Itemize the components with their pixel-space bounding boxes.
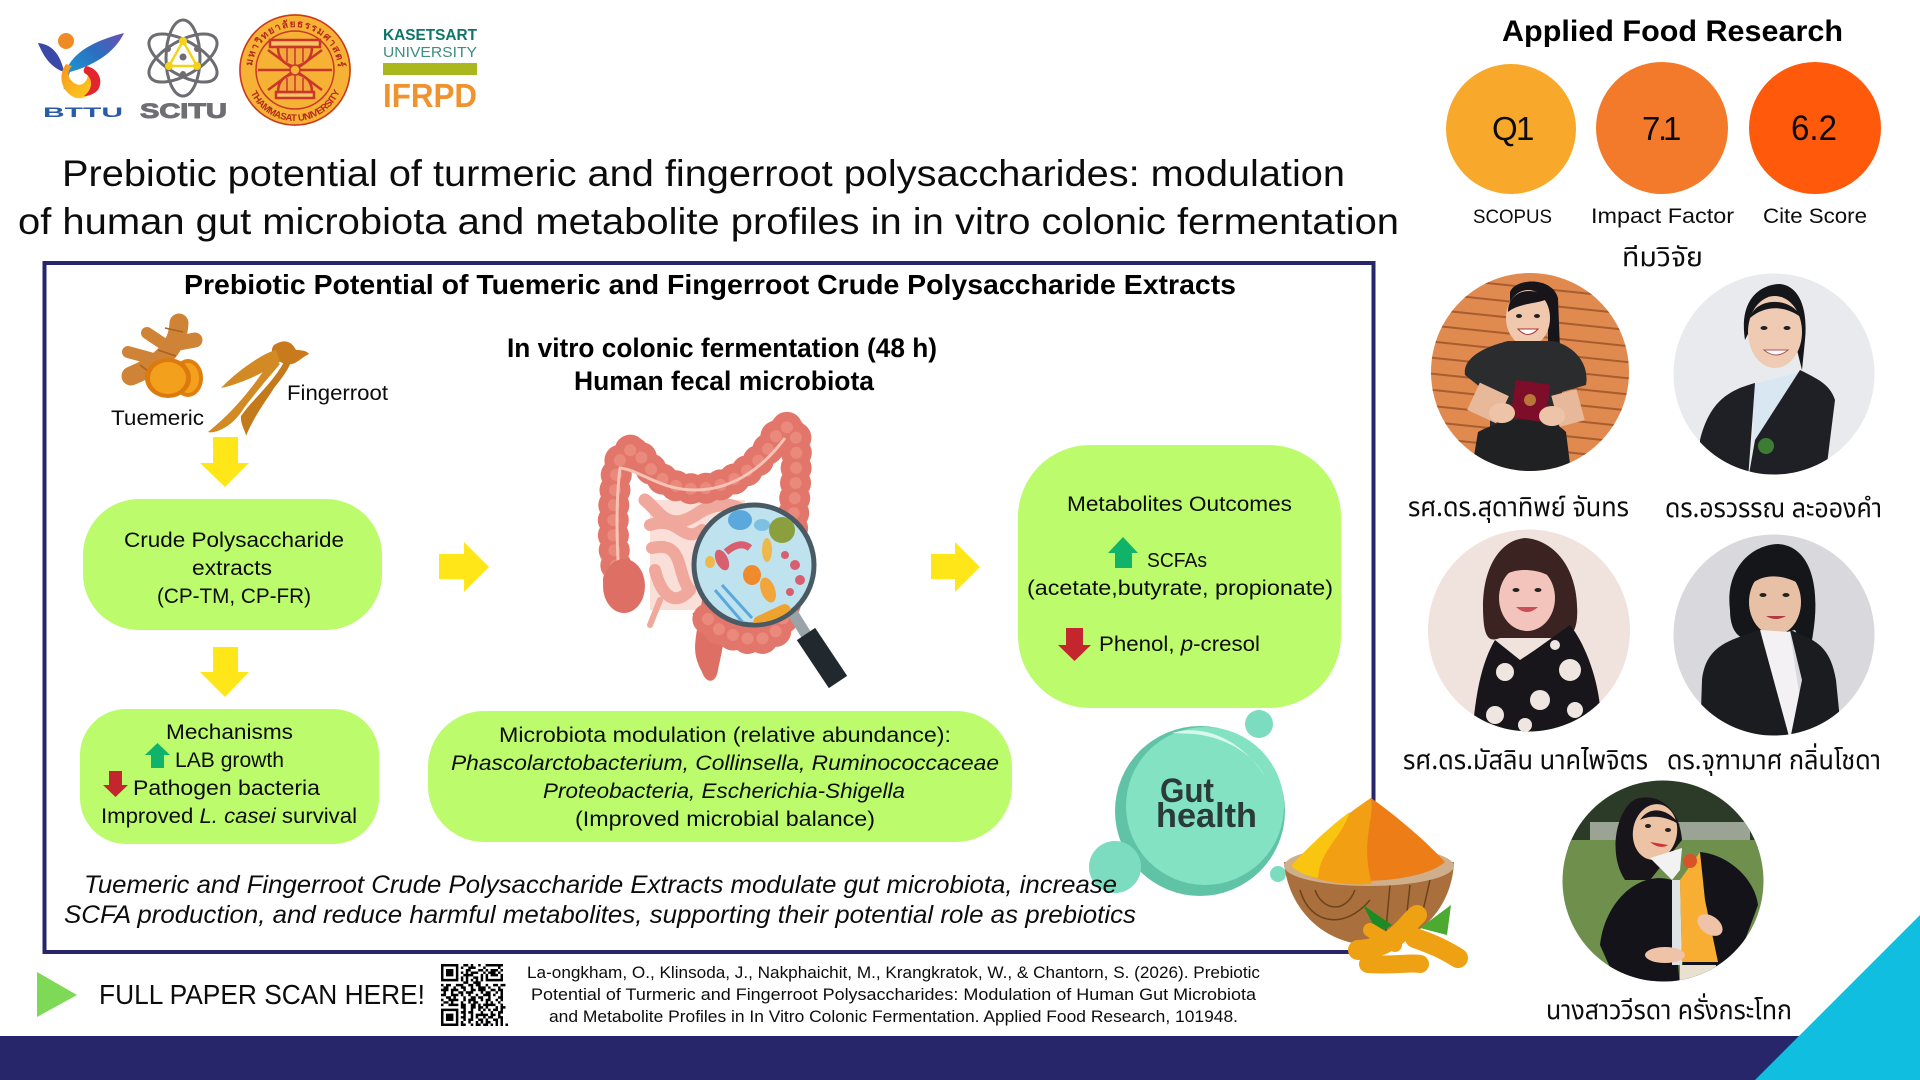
portrait 2	[1670, 270, 1880, 480]
journal heading: Applied Food Research	[1502, 15, 1843, 48]
icon: fingerroot	[208, 341, 309, 436]
box: microbiota modulation: (Improved microbial balance)	[575, 807, 875, 831]
box: microbiota modulation: Microbiota modulation (relative abundance):	[499, 723, 951, 747]
citation: La-ongkham, O., Klinsoda, J., Nakphaichit, M., Krangkratok, W., & Chantorn, S. (2026). Prebiotic	[527, 964, 1260, 982]
box: crude polysaccharide extracts: extracts	[192, 556, 272, 580]
box: metabolites outcomes: Metabolites Outcomes	[1067, 492, 1292, 516]
arrow: down to extracts	[200, 437, 249, 487]
conclusion text: SCFA production, and reduce harmful metabolites, supporting their potential role as prebiotics	[64, 901, 1136, 929]
icon: red down arrow	[103, 771, 128, 797]
icon: gut health bubble: Gut	[1160, 772, 1214, 810]
fermentation heading	[507, 333, 937, 396]
box: mechanisms	[80, 709, 379, 844]
logo: Thammasat University seal	[239, 14, 351, 126]
name 5: นางสาววีรดา ครั่งกระโทก	[1546, 991, 1792, 1032]
icon: gut health bubble	[1089, 710, 1286, 896]
metric: SCOPUS Q1	[1446, 64, 1576, 228]
conclusion text: Tuemeric and Fingerroot Crude Polysaccharide Extracts modulate gut microbiota, increase	[84, 871, 1117, 899]
box: crude polysaccharide extracts	[83, 499, 382, 630]
box: metabolites outcomes: (acetate,butyrate, propionate)	[1027, 576, 1333, 600]
box: microbiota modulation: Proteobacteria, Escherichia-Shigella	[543, 779, 905, 803]
label: Tuemeric: Tuemeric	[111, 406, 204, 430]
icon: red down arrow	[1058, 628, 1091, 661]
label: Fingerroot: Fingerroot	[287, 381, 388, 405]
logo: BTTU	[38, 33, 124, 120]
portrait 1	[1431, 273, 1629, 471]
title: of human gut microbiota and metabolite profiles in in vitro colonic fermentation	[18, 201, 1399, 242]
citation: and Metabolite Profiles in In Vitro Colonic Fermentation. Applied Food Research, 101948.	[549, 1008, 1238, 1026]
logo: Kasetsart University IFRPD: KASETSART	[383, 27, 477, 44]
icon: turmeric roots with leaves	[1358, 905, 1458, 965]
icon: green up arrow	[1108, 537, 1138, 568]
citation	[527, 964, 1260, 1026]
illustration: human gut with magnifier	[603, 427, 838, 682]
box: crude polysaccharide extracts: Crude Polysaccharide	[124, 528, 344, 552]
metric: Impact Factor 7.1: 7.1	[1642, 110, 1681, 147]
logo: Thammasat University seal: มหาวิทยาลัยธรรมศาสตร์	[246, 19, 347, 66]
conclusion text	[64, 871, 1136, 929]
logo: SCITU: SCITU	[140, 100, 227, 123]
icon: green up arrow	[145, 743, 170, 768]
name 4: ดร.จุฑามาศ กลิ่นโชดา	[1667, 741, 1881, 782]
metric: Impact Factor 7.1	[1591, 62, 1734, 228]
metric: Cite Score 6.2: Cite Score	[1763, 205, 1867, 228]
box: mechanisms: Pathogen bacteria	[133, 776, 320, 800]
arrow: down to mechanisms	[200, 647, 249, 697]
citation: Potential of Turmeric and Fingerroot Polysaccharides: Modulation of Human Gut Microbiota	[531, 986, 1257, 1004]
logo: Kasetsart University IFRPD	[383, 27, 477, 114]
panel: prebiotic potential frame	[44, 263, 1374, 952]
box: mechanisms: Improved L. casei survival	[101, 804, 357, 828]
logo: Kasetsart University IFRPD: UNIVERSITY	[383, 44, 477, 61]
icon: full paper play triangle	[37, 972, 77, 1017]
icon: gut health bubble: health	[1156, 797, 1257, 835]
box: microbiota modulation: Phascolarctobacterium, Collinsella, Ruminococcaceae	[451, 751, 999, 775]
portrait 3	[1425, 528, 1635, 738]
box: microbiota modulation	[428, 711, 1012, 842]
box: crude polysaccharide extracts: (CP-TM, CP-FR)	[157, 584, 311, 608]
arrow: fermentation to metabolites	[931, 542, 980, 592]
title	[18, 153, 1399, 242]
title: Prebiotic potential of turmeric and fingerroot polysaccharides: modulation	[62, 153, 1345, 194]
research team heading: ทีมวิจัย	[1622, 238, 1703, 279]
full paper label: FULL PAPER SCAN HERE!	[99, 979, 425, 1010]
portrait 4	[1670, 530, 1880, 740]
fermentation heading: Human fecal microbiota	[574, 366, 874, 396]
corner triangle	[1755, 915, 1920, 1080]
arrow: extracts to fermentation	[439, 542, 489, 592]
box: mechanisms: LAB growth	[175, 748, 284, 772]
name 1: รศ.ดร.สุดาทิพย์ จันทร	[1408, 488, 1629, 529]
logo: SCITU	[140, 20, 227, 123]
box: metabolites outcomes: Phenol, p-cresol	[1099, 632, 1260, 656]
box: metabolites outcomes	[1018, 445, 1341, 708]
icon: turmeric rhizome	[128, 323, 203, 398]
icon: turmeric powder bowl	[1284, 798, 1454, 945]
panel heading: Prebiotic Potential of Tuemeric and Fingerroot Crude Polysaccharide Extracts	[184, 269, 1236, 300]
metric: SCOPUS Q1: SCOPUS	[1473, 206, 1552, 228]
logo: BTTU: BTTU	[43, 104, 123, 120]
footer band	[0, 1036, 1920, 1080]
box: metabolites outcomes: SCFAs	[1147, 550, 1207, 572]
metric: SCOPUS Q1: Q1	[1492, 110, 1534, 147]
handle	[792, 612, 807, 636]
metric: Impact Factor 7.1: Impact Factor	[1591, 205, 1734, 228]
portrait 5	[1560, 778, 1770, 990]
fermentation heading: In vitro colonic fermentation (48 h)	[507, 333, 937, 363]
logo: Thammasat University seal: THAMMASAT UNIVERSITY	[252, 88, 339, 121]
metric: Cite Score 6.2	[1749, 62, 1881, 228]
icon: QR code	[441, 964, 508, 1026]
name 2: ดร.อรวรรณ ละอองคำ	[1665, 489, 1882, 530]
logo: Kasetsart University IFRPD: IFRPD	[383, 77, 477, 114]
name 3: รศ.ดร.มัสลิน นาคไพจิตร	[1403, 741, 1648, 782]
metric: Cite Score 6.2: 6.2	[1791, 109, 1837, 148]
box: mechanisms: Mechanisms	[166, 720, 293, 744]
